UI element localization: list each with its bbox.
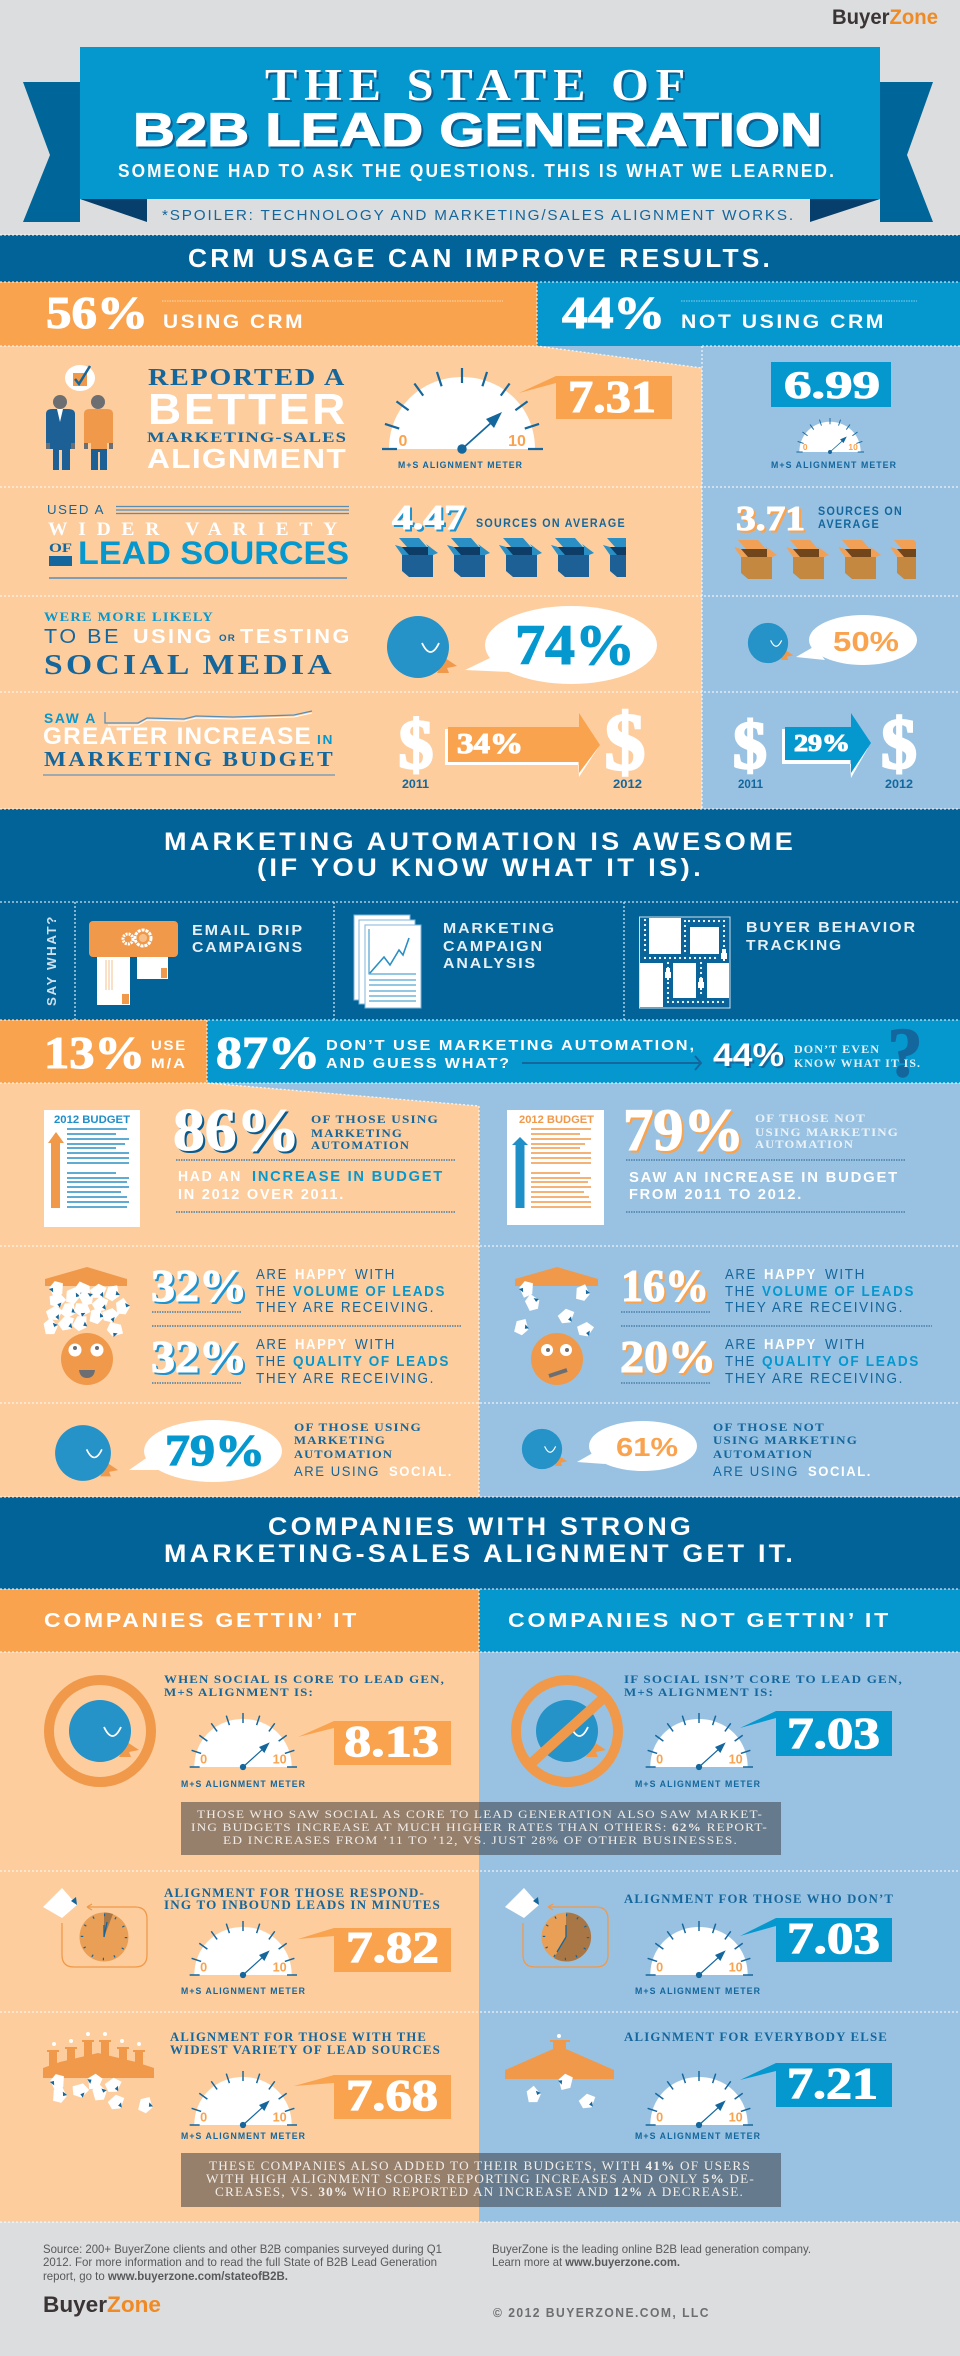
callout: 6.99 [771,362,891,407]
gauge: 7.68: 10 [273,2111,287,2125]
callout: 7.03 second [740,1914,892,1963]
text: marketing campaign analysis: MARKETING [443,920,556,937]
copyright: © 2012 BUYERZONE.COM, LLC [493,2305,710,2320]
gauge: 7.21 [646,2071,753,2128]
panel: companies not gettin' it header [479,1589,960,1652]
text: email drip campaigns [192,922,304,956]
stat: 4.47 sources: 4.47 [392,498,465,537]
icon: bird in ring [49,1680,151,1782]
speech bubble: 74%: 74% [515,614,635,677]
text block: marketing budget [43,710,335,775]
gauge caption: M+S ALIGNMENT METER [635,2131,761,2141]
speech bubble: 79%: 79% [165,1426,265,1475]
stat: 32% quality of leads: ARE [256,1336,288,1353]
gauge caption: M+S ALIGNMENT METER [635,1986,761,1996]
icon: bird [387,616,457,678]
label: say what: SAY WHAT? [44,915,59,1006]
icon: bird [55,1425,118,1481]
text block: using social left: SOCIAL. [389,1463,453,1479]
callout: 7.82: 7.82 [346,1923,439,1972]
stat: 32% quality of leads: WITH [355,1336,396,1353]
text: if social isn't core [624,1672,903,1699]
text: responding in minutes: ING TO INBOUND LEADS IN MINUTES [164,1897,441,1912]
stat: 86%: OF THOSE USING [311,1112,439,1126]
stat: 20% quality of leads [620,1331,920,1387]
text block: using social right: OF THOSE NOT [713,1420,825,1434]
year labels [402,777,642,791]
year labels: 2012 [613,777,642,791]
text block: increase in budget left: INCREASE IN BUDGET [252,1168,444,1185]
stat: 32% volume of leads: HAPPY [295,1266,348,1283]
text block: social media [44,609,352,681]
gauge caption: M+S ALIGNMENT METER [771,460,897,470]
callout note: social budgets: ED INCREASES FROM ’11 TO ’12, VS. JUST 28% OF OTHER BUSINESSES. [223,1833,738,1847]
footer: source text: report, go to www.buyerzone.com/stateofB2B. [43,2269,288,2283]
stat: 4.47 sources [392,498,626,537]
stat: 32% volume of leads [151,1260,462,1383]
callout: 7.21: 7.21 [787,2059,878,2108]
text block: better alignment: BETTER [148,385,348,434]
icon: 2012 budget left [44,1110,140,1227]
stat: 16% volume of leads: THEY ARE RECEIVING. [725,1299,904,1316]
text: when social is core: WHEN SOCIAL IS CORE TO LEAD GEN, [164,1672,445,1686]
stat: 20% quality of leads: 20% [620,1331,716,1382]
text block: marketing budget: MARKETING BUDGET [44,747,335,771]
logo: BuyerZone footer: BuyerZone [43,2292,161,2317]
text block: marketing budget: IN [317,732,334,747]
panel: 56% using CRM [0,282,537,346]
gauge: 7.31: 0 [399,433,408,450]
text: those who don't: ALIGNMENT FOR THOSE WHO DON’T [624,1891,894,1906]
icon: many chimneys roof with leads [43,2032,154,2115]
stat: 3.71 sources: AVERAGE [818,517,880,531]
text block: wider variety of lead sources: USED A [47,502,105,517]
gauge: 7.03 second: 0 [656,1961,663,1975]
text block: social media: TESTING [240,626,352,648]
icon: clock with paper, slow [505,1888,608,1967]
speech bubble: 61% [577,1421,697,1471]
panel: 13% use M/A: M/A [151,1055,187,1071]
callout note: budgets [181,2153,781,2207]
gauge: 7.03: 10 [729,1753,743,1767]
icon: 2012 budget right [507,1110,604,1225]
icon: small bird [522,1429,567,1469]
stat: 79%: USING MARKETING [755,1125,899,1139]
text: buyer behavior tracking: BUYER BEHAVIOR [746,919,917,936]
callout: 7.82 [298,1923,451,1972]
section heading: (IF YOU KNOW WHAT IT IS). [257,854,704,882]
stat: 20% quality of leads: THEY ARE RECEIVING. [725,1370,904,1387]
section heading [164,828,796,882]
gauge: 8.13: 0 [200,1753,207,1767]
subtitle: SOMEONE HAD TO ASK THE QUESTIONS. THIS IS WHAT WE LEARNED. [118,161,836,181]
stat: 20% quality of leads: WITH [825,1336,866,1353]
icon: single chimney roof with leads [505,2034,614,2111]
text: responding in minutes: ALIGNMENT FOR THOSE RESPOND- [164,1885,425,1900]
stat: 86%: MARKETING [311,1126,403,1140]
icon: bird in prohibited ring [516,1680,618,1782]
icon: dollar right small: $ [881,704,917,784]
stat: 86%: AUTOMATION [311,1138,410,1152]
footer: source text: 2012. For more information and to read the full State of B2B Lead Generation [43,2255,437,2269]
panel: CRM comparison backgrounds [0,346,960,809]
speech bubble: 74% [465,606,657,684]
speech bubble: 50% [796,615,917,665]
text block: using social right: SOCIAL. [808,1463,872,1479]
text: if social isn't core: M+S ALIGNMENT IS: [624,1685,774,1699]
stat: 16% volume of leads: THE [725,1283,756,1300]
title line 2: B2B LEAD GENERATION [133,103,822,156]
gauge caption: M+S ALIGNMENT METER [181,1779,306,1789]
stat: 16% volume of leads: HAPPY [764,1266,817,1283]
text block: social media: TO BE [44,626,121,648]
icon: orange boxes [734,540,933,579]
text block: using social right [713,1420,872,1479]
title line 1: THE STATE OF [265,60,692,110]
gauge: 7.68 [190,2071,297,2128]
callout note: social budgets [181,1802,781,1855]
callout note: social budgets: THOSE WHO SAW SOCIAL AS CORE TO LEAD GENERATION ALSO SAW MARKET- [197,1807,763,1821]
stat: 16% volume of leads: WITH [825,1266,866,1283]
icon: question mark: ? [888,1015,922,1092]
callout note: budgets: CREASES, VS. 30% WHO REPORTED AN INCREASE AND 12% A DECREASE. [215,2184,744,2199]
section 2 band: marketing automation [0,809,960,1020]
gauge: 7.03 second [646,1921,753,1978]
stat: 32% volume of leads: VOLUME OF LEADS [293,1283,446,1300]
footer: about text [492,2242,811,2269]
icon: 2012 budget right: 2012 BUDGET [519,1114,594,1126]
callout: 7.31: 7.31 [568,372,656,422]
panel: companies not gettin' it header: COMPANIES NOT GETTIN’ IT [508,1610,891,1632]
text: marketing campaign analysis: CAMPAIGN [443,938,544,955]
gauge: 7.31 [382,368,543,454]
arrow: 34% [445,713,600,777]
panel: 13% use M/A: 13% [44,1028,145,1078]
speech bubble: 79% [129,1420,282,1482]
gauge caption: M+S ALIGNMENT METER [398,460,523,470]
icon: dollar left small: $ [733,707,767,783]
text block: increase in budget left [176,1160,456,1212]
footer: about text: Learn more at www.buyerzone.com. [492,2255,680,2269]
panel: 56% using CRM: USING CRM [163,312,305,333]
gauge: 6.99: 10 [848,442,858,452]
panel: 13% use M/A: USE [151,1037,187,1053]
panel: 87% don't use M/A: AND GUESS WHAT? [326,1055,511,1072]
icon: 2012 budget left: 2012 BUDGET [54,1114,130,1126]
text block: wider variety of lead sources [47,502,349,578]
stat: 32% quality of leads [151,1331,450,1387]
gauge: 7.82: 10 [273,1961,287,1975]
stat: 3.71 sources [736,499,903,538]
stat: 32% quality of leads: THEY ARE RECEIVING. [256,1370,435,1387]
icon: clock with paper, minutes [43,1888,147,1967]
text block: social media: OR [219,633,236,643]
text block: using social left: MARKETING [294,1433,386,1447]
text block: using social right: ARE USING [713,1463,799,1479]
text block: increase in budget right: SAW AN INCREASE IN BUDGET [629,1169,899,1186]
section 3 band: alignment [0,1497,960,1589]
text block: using social right: AUTOMATION [713,1447,813,1461]
text: buyer behavior tracking [746,919,917,954]
gauge: 8.13: 10 [273,1753,287,1767]
text block: increase in budget left: IN 2012 OVER 2011. [178,1186,345,1203]
stat: 32% volume of leads: ARE [256,1266,288,1283]
gauge: 7.03 second: 10 [729,1961,743,1975]
spoiler line: *SPOILER: TECHNOLOGY AND MARKETING/SALES ALIGNMENT WORKS. [162,207,795,224]
panel: 87% don't use M/A [207,1020,960,1083]
stat: 32% quality of leads: HAPPY [295,1336,348,1353]
panel: 13% use M/A [0,1020,207,1083]
callout: 6.99: 6.99 [784,364,880,407]
text block: social media: USING [133,626,214,648]
stat: 32% quality of leads: THE [256,1353,287,1370]
footer: source text [43,2242,442,2283]
text: email drip campaigns: EMAIL DRIP [192,922,304,939]
text block: increase in budget right: FROM 2011 TO 2012. [629,1186,803,1203]
arrow: 29%: 29% [794,731,850,757]
stat: 86% [173,1097,439,1163]
callout: 7.03 [740,1709,892,1758]
panel: 87% don't use M/A: DON’T USE MARKETING AUTOMATION, [326,1037,696,1054]
stat: 32% quality of leads: QUALITY OF LEADS [293,1353,450,1370]
text: when social is core [164,1672,445,1699]
stat: 16% volume of leads: VOLUME OF LEADS [762,1283,915,1300]
gauge: 7.82 [190,1921,297,1978]
stat: 79%: AUTOMATION [755,1137,854,1151]
gauge: 7.03 [646,1713,753,1770]
footer: source text: Source: 200+ BuyerZone clients and other B2B companies surveyed during Q1 [43,2242,442,2256]
icon: small bird [748,623,793,663]
text block: wider variety of lead sources: OF [49,540,72,555]
section heading: CRM USAGE CAN IMPROVE RESULTS. [188,243,773,273]
stat: 3.71 sources: SOURCES ON [818,504,903,518]
text block: better alignment: MARKETING-SALES [147,430,347,446]
text block: social media: WERE MORE LIKELY [44,609,214,624]
gauge: 6.99: 0 [803,442,808,452]
year labels [738,777,913,791]
stat: 79% [623,1097,899,1163]
text block: using social left: OF THOSE USING [294,1420,422,1434]
panel: 44% not using CRM [537,282,960,346]
panel: 56% using CRM: 56% [46,288,148,338]
stat: 44% don't know: KNOW WHAT IT IS. [794,1056,921,1070]
icon: many leads falling on happy face [39,1267,133,1385]
icon: email drip [89,921,178,1005]
callout: 7.21 [740,2059,892,2108]
text block: using social left: ARE USING [294,1463,380,1479]
year labels: 2011 [738,777,763,791]
year labels: 2012 [885,777,913,791]
icon: dollar left: $ [398,707,434,784]
text block: increase in budget left: HAD AN [178,1168,242,1185]
text block: increase in budget right [626,1160,906,1212]
text block: using social left: AUTOMATION [294,1447,393,1461]
text block: better alignment: ALIGNMENT [147,443,347,474]
text: email drip campaigns: CAMPAIGNS [192,939,304,956]
logo: BuyerZone top: BuyerZone [832,6,938,29]
panel: 44% not using CRM: 44% [562,288,665,338]
gauge caption: M+S ALIGNMENT METER [635,1779,761,1789]
stat: 16% volume of leads: ARE [725,1266,757,1283]
stat: 86%: 86% [173,1097,300,1163]
text: responding in minutes [164,1885,441,1912]
stat: 32% quality of leads: 32% [151,1331,247,1382]
section 1 band: CRM [0,235,960,282]
panel: companies gettin' it header [0,1589,479,1652]
callout: 7.31 [519,372,672,422]
section heading: MARKETING-SALES ALIGNMENT GET IT. [164,1540,796,1568]
panel: companies gettin' it header: COMPANIES GETTIN’ IT [44,1610,359,1632]
text block: using social left [294,1420,453,1479]
stat: 32% volume of leads: WITH [355,1266,396,1283]
text block: social media: SOCIAL MEDIA [44,650,335,681]
text: marketing campaign analysis: ANALYSIS [443,955,537,972]
callout note: social budgets: ING BUDGETS INCREASE AT MUCH HIGHER RATES THAN OTHERS: 62% REPORT- [191,1820,768,1834]
speech bubble: 61%: 61% [616,1432,678,1462]
gauge: 7.21: 10 [729,2111,743,2125]
stat: 20% quality of leads: THE [725,1353,756,1370]
stat: 20% quality of leads: HAPPY [764,1336,817,1353]
stat: 20% quality of leads: QUALITY OF LEADS [762,1353,920,1370]
panel: 87% don't use M/A: 87% [216,1028,320,1078]
gauge: 7.82: 0 [200,1961,207,1975]
icon: dollar right: $ [604,696,646,787]
text block: better alignment: REPORTED A [148,365,346,391]
gauge: 7.21: 0 [656,2111,663,2125]
stat: 79%: OF THOSE NOT [755,1111,866,1125]
stat: 16% volume of leads [621,1260,932,1383]
text block: marketing budget: SAW A [44,710,97,726]
stat: 79%: 79% [623,1097,744,1163]
stat: 20% quality of leads: ARE [725,1336,757,1353]
callout: 7.03: 7.03 [787,1709,880,1758]
gauge: 6.99 [796,418,864,454]
stat: 44% don't know: DON’T EVEN [794,1042,880,1056]
callout: 8.13 [298,1717,451,1766]
gauge: 7.03: 0 [656,1753,663,1767]
stat: 16% volume of leads: 16% [621,1260,709,1311]
section heading [164,1513,796,1568]
stat: 44% don't know [713,1037,921,1073]
stat: 3.71 sources: 3.71 [736,499,805,538]
stat: 4.47 sources: SOURCES ON AVERAGE [476,516,626,530]
callout note: budgets: WITH HIGH ALIGNMENT SCORES REPORTING INCREASES AND ONLY 5% DE- [206,2171,755,2186]
text: widest variety [170,2029,441,2057]
text block: better alignment [147,365,348,474]
text: widest variety: ALIGNMENT FOR THOSE WITH THE [170,2029,427,2044]
callout: 7.68 [294,2071,451,2120]
icon: buyer behavior maze [640,917,730,1008]
text: buyer behavior tracking: TRACKING [746,937,843,954]
icon: two men with speech bubble [46,365,113,470]
section heading: MARKETING AUTOMATION IS AWESOME [164,828,796,856]
text block: using social right: USING MARKETING [713,1433,858,1447]
panel: 44% not using CRM: NOT USING CRM [681,312,886,333]
year labels: 2011 [402,777,429,791]
icon: few leads falling on unhappy face [511,1267,598,1385]
text block: marketing budget: GREATER INCREASE [43,723,312,750]
icon: blue boxes [395,538,646,577]
text block: wider variety of lead sources: WIDER VARIETY [48,519,348,540]
text: everybody else: ALIGNMENT FOR EVERYBODY ELSE [624,2029,888,2044]
text: if social isn't core: IF SOCIAL ISN’T CORE TO LEAD GEN, [624,1672,903,1686]
gauge caption: M+S ALIGNMENT METER [181,2131,306,2141]
footer: about text: BuyerZone is the leading online B2B lead generation company. [492,2242,811,2256]
callout note: budgets: THESE COMPANIES ALSO ADDED TO THEIR BUDGETS, WITH 41% OF USERS [209,2158,751,2173]
text: when social is core: M+S ALIGNMENT IS: [164,1685,314,1699]
header ribbon banner [23,47,933,222]
gauge: 7.31: 10 [508,433,526,450]
speech bubble: 50%: 50% [833,626,899,657]
arrow: 29% [782,713,871,778]
gauge: 7.68: 0 [200,2111,207,2125]
section heading: COMPANIES WITH STRONG [268,1513,694,1541]
callout: 7.03 second: 7.03 [787,1914,880,1963]
stat: 32% volume of leads: THEY ARE RECEIVING. [256,1299,435,1316]
panel: alignment backgrounds [0,1652,960,2222]
callout: 8.13: 8.13 [344,1717,439,1766]
icon: campaign analysis document stack [354,915,421,1008]
arrow: 34%: 34% [457,729,523,760]
text: marketing campaign analysis [443,920,556,972]
stat: 32% volume of leads: THE [256,1283,287,1300]
gauge caption: M+S ALIGNMENT METER [181,1986,306,1996]
callout: 7.68: 7.68 [346,2071,438,2120]
panel: automation comparison backgrounds [0,1083,960,1497]
stat: 32% volume of leads: 32% [151,1260,247,1311]
arrow [522,1056,701,1070]
gauge: 8.13 [190,1713,297,1770]
text block: wider variety of lead sources: LEAD SOURCES [78,535,349,571]
text: widest variety: WIDEST VARIETY OF LEAD SOURCES [170,2042,441,2057]
stat: 44% don't know: 44% [713,1037,784,1073]
